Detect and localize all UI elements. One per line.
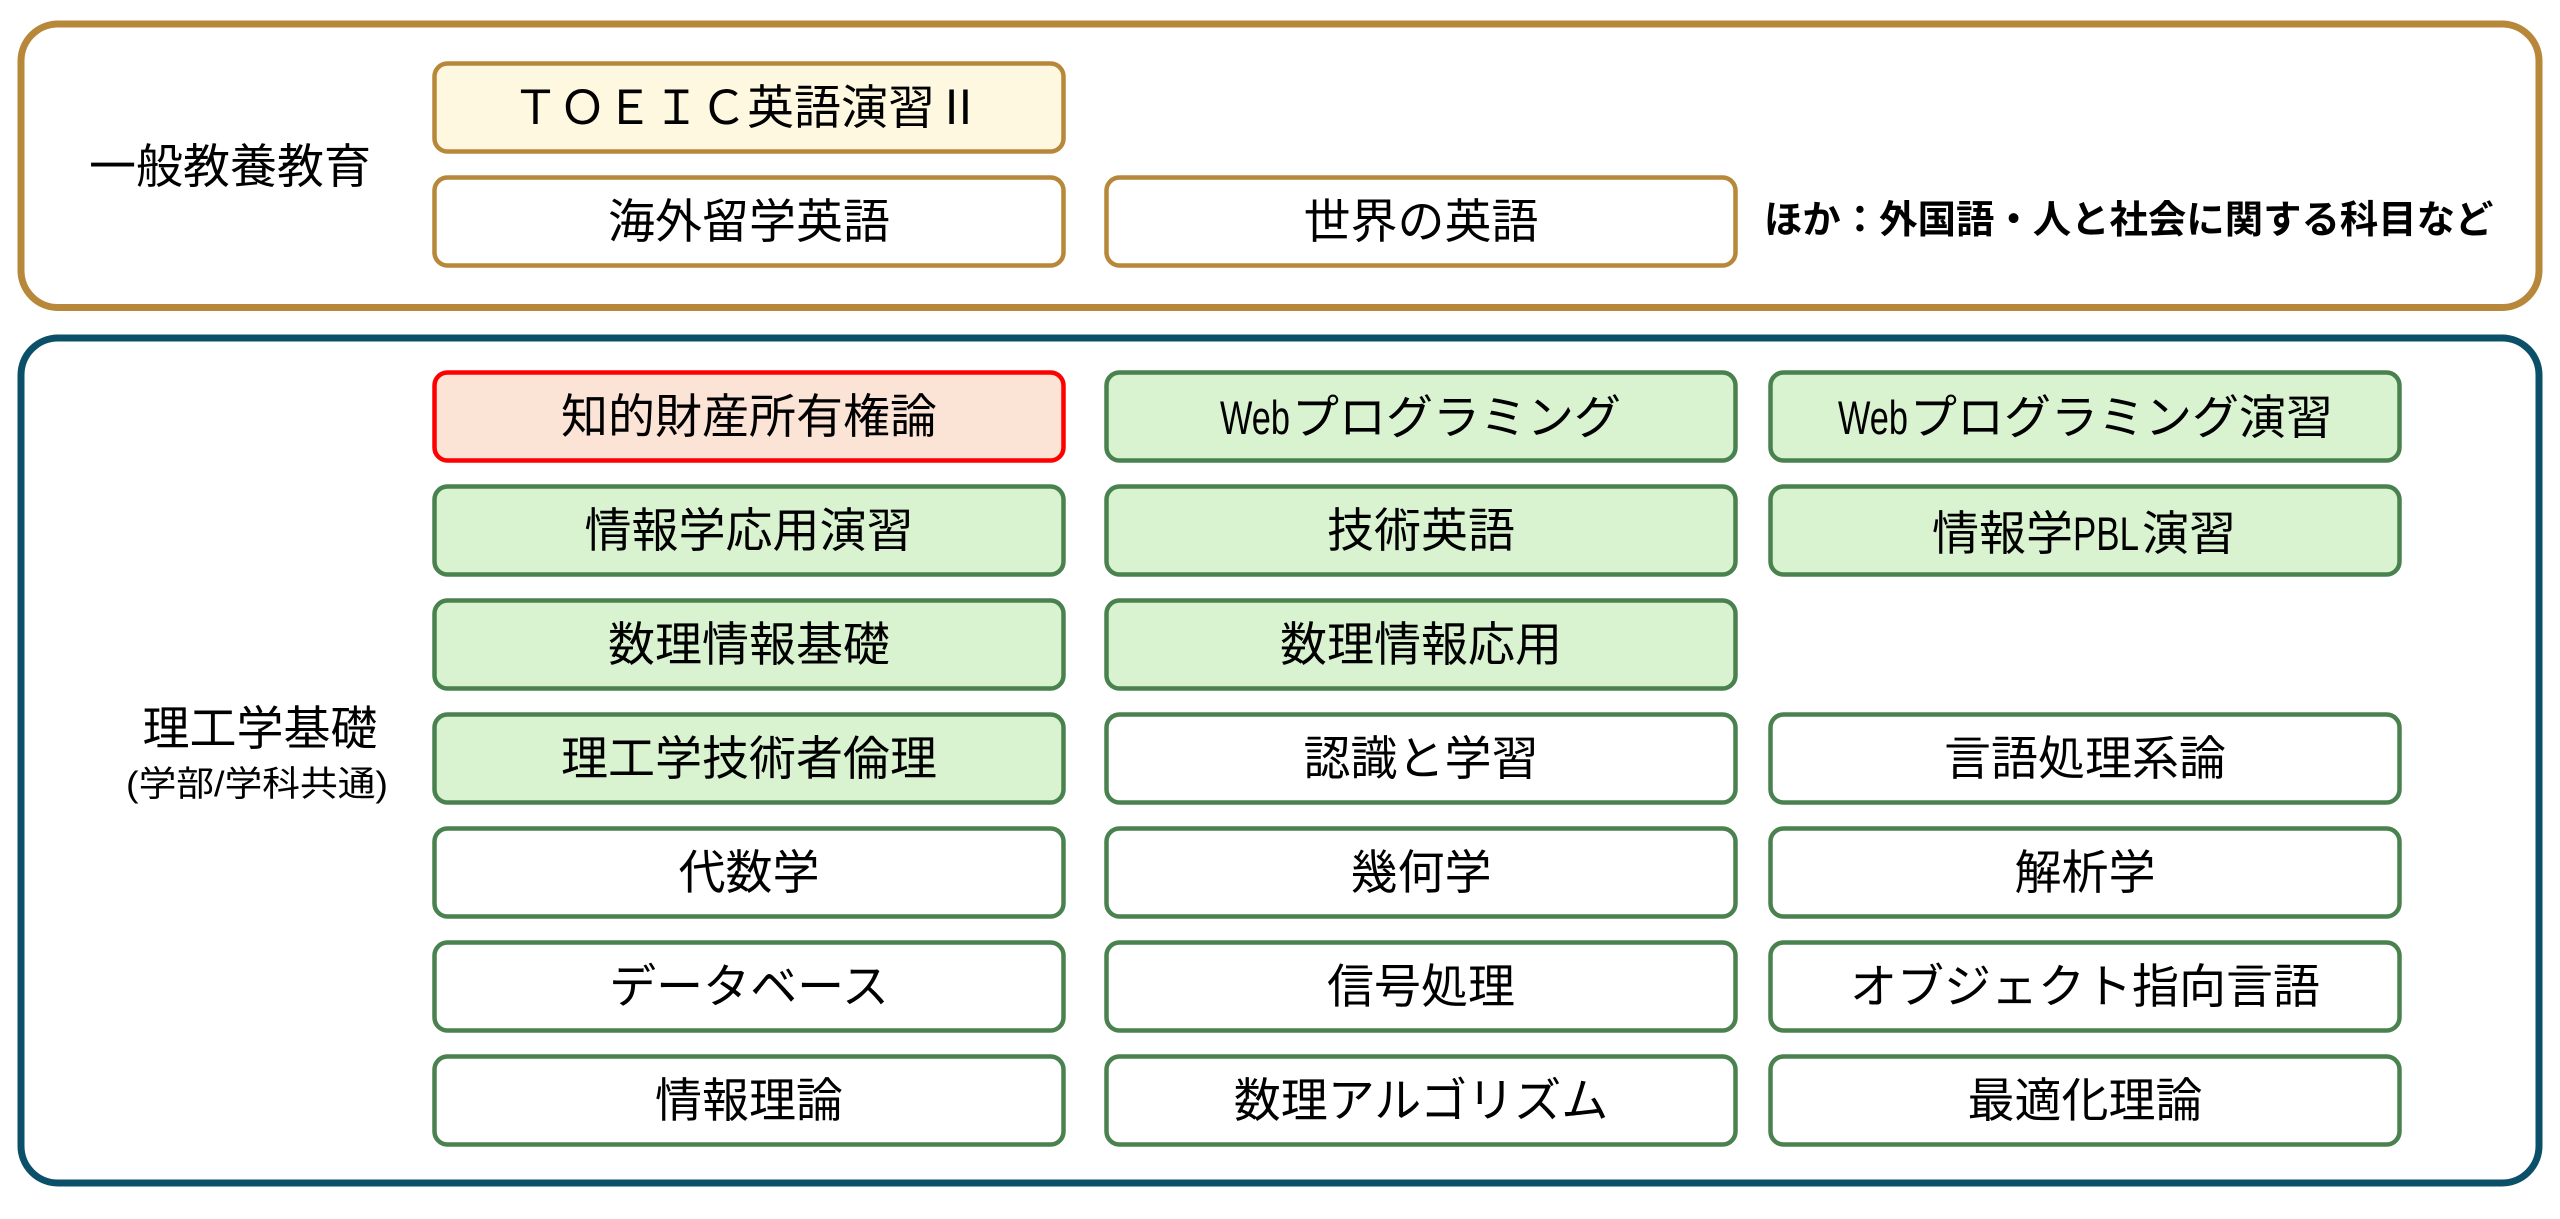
course: database: データベース [609,960,889,1013]
course: engineering ethics [434,714,1064,802]
course: object oriented languages [1770,942,2400,1030]
course: informatics PBL practice: PBL [2073,507,2139,560]
course: informatics PBL practice: 情報学 [1932,507,2073,560]
course: mathematical informatics basics: 数理情報基礎 [608,618,890,671]
course: informatics PBL practice: 演習 [2142,507,2236,560]
course: TOEIC English II: ＴＯＥＩＣ英語演習Ⅱ [512,81,982,134]
course: intellectual property [434,372,1064,460]
course: optimization theory: 最適化理論 [1968,1074,2202,1127]
course: technical English [1106,486,1736,574]
course: mathematical algorithms: 数理アルゴリズム [1234,1074,1608,1127]
course: applied informatics practice [434,486,1064,574]
course: geometry: 幾何学 [1350,846,1492,899]
panel: science and engineering fundamentals [21,338,2539,1183]
course: mathematical informatics applied: 数理情報応用 [1280,618,1562,671]
course: recognition and learning: 認識と学習 [1304,732,1538,785]
course: algebra [434,828,1064,916]
heading: science and engineering fundamentals [126,702,388,804]
course: study abroad English [434,178,1064,266]
course: web programming: Web [1220,391,1290,444]
course: signal processing: 信号処理 [1327,960,1515,1013]
course: technical English: 技術英語 [1327,504,1515,557]
note: other subjects: ほか：外国語・人と社会に関する科目など [1764,199,2493,242]
course: object oriented languages: オブジェクト指向言語 [1850,960,2320,1013]
course: web programming practice: Web [1838,391,1908,444]
course: signal processing [1106,942,1736,1030]
course: applied informatics practice: 情報学応用演習 [584,504,914,557]
course: world Englishes [1106,178,1736,266]
heading: science and engineering fundamentals: 理工学基礎 [142,702,378,755]
course: geometry [1106,828,1736,916]
course: web programming practice [1770,372,2400,460]
course: recognition and learning [1106,714,1736,802]
course: information theory: 情報理論 [655,1074,843,1127]
course: mathematical informatics applied [1106,600,1736,688]
course: web programming [1106,372,1736,460]
course: TOEIC English II [434,64,1064,152]
heading: science and engineering fundamentals: (学部/学科共通) [126,765,388,804]
panel: general education [21,24,2539,308]
course: optimization theory [1770,1056,2400,1144]
course: language processing: 言語処理系論 [1944,732,2226,785]
course: language processing [1770,714,2400,802]
course: web programming practice: プログラミング演習 [1910,391,2333,444]
course: mathematical algorithms [1106,1056,1736,1144]
course: intellectual property: 知的財産所有権論 [561,390,937,443]
course: engineering ethics: 理工学技術者倫理 [561,732,937,785]
course: information theory [434,1056,1064,1144]
course: analysis [1770,828,2400,916]
course: web programming: プログラミング [1292,391,1621,444]
heading: general education: 一般教養教育 [89,140,371,193]
course: mathematical informatics basics [434,600,1064,688]
course: database [434,942,1064,1030]
course: informatics PBL practice [1770,486,2400,574]
course: world Englishes: 世界の英語 [1304,195,1538,248]
course: algebra: 代数学 [678,846,820,899]
course: analysis: 解析学 [2014,846,2156,899]
course: study abroad English: 海外留学英語 [608,195,890,248]
